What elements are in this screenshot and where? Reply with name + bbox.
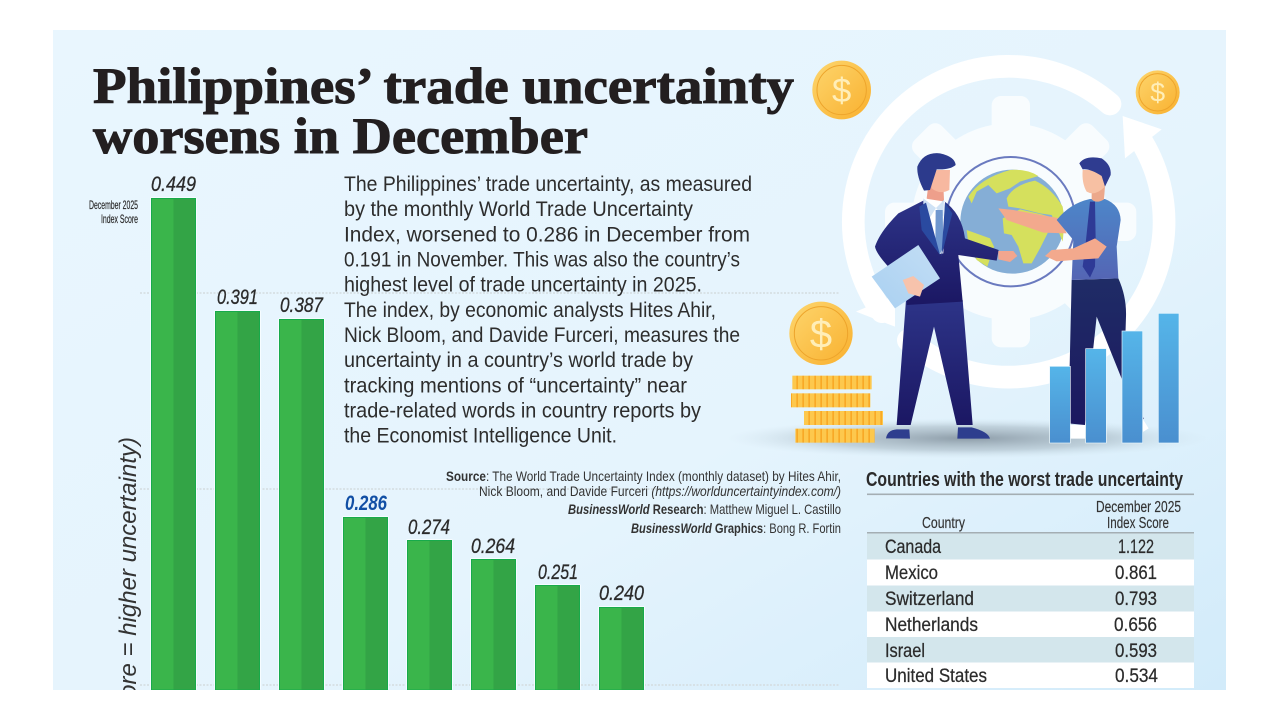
bar 0.251: [534, 561, 581, 690]
source and credits: Source: The World Trade Uncertainty Index (monthly dataset) by Hites Ahir,: [446, 468, 841, 484]
table header: [867, 494, 1194, 534]
source and credits: BusinessWorld Research: Matthew Miguel L. Castillo: [568, 501, 841, 517]
bar 0.387: 0.387: [280, 294, 324, 317]
row: Mexico: 0.861: [1115, 562, 1157, 584]
axis note: December 2025 Index Score: December 2025: [89, 198, 138, 212]
body text: by the monthly World Trade Uncertainty: [344, 197, 693, 221]
title: worsens in December: [93, 109, 588, 165]
icon: coin top right: $: [1150, 78, 1165, 108]
row: Israel: Israel: [885, 640, 925, 662]
title: Philippines’ trade uncertainty: [93, 59, 794, 115]
icon: gear: [885, 96, 1136, 347]
icon: coin left: [789, 302, 853, 365]
bar 0.286 highlighted: 0.286: [345, 492, 387, 515]
row: Mexico: [867, 560, 1194, 586]
arrowhead: lower left: [856, 295, 895, 327]
axis label: ore = higher uncertainty): [115, 437, 142, 698]
bar 0.286 highlighted: [342, 492, 389, 690]
table: countries with the worst trade uncertainty: [866, 469, 1194, 688]
chart: grid lines and bars: [89, 173, 840, 698]
body text: The index, by economic analysts Hites Ahir,: [344, 298, 716, 322]
icon: coin left: $: [810, 313, 832, 357]
title: [93, 59, 794, 165]
body text: [344, 172, 752, 448]
row: Mexico: Mexico: [885, 562, 938, 584]
bar 0.240: [598, 582, 645, 690]
blue rising bars: [1050, 313, 1179, 443]
man on the left: [872, 153, 1017, 439]
body text: Nick Bloom, and Davide Furceri, measures the: [344, 323, 740, 347]
row: Israel: 0.593: [1115, 640, 1157, 662]
row: Canada: Canada: [885, 536, 941, 558]
bar 0.264: [470, 535, 517, 690]
row: United States: United States: [885, 665, 987, 687]
bar 0.449: [150, 173, 197, 690]
table title: Countries with the worst trade uncertainty: [866, 469, 1184, 491]
bar 0.274: [406, 516, 453, 690]
row: Switzerland: Switzerland: [885, 588, 974, 610]
table header: Index Score: [1107, 515, 1169, 532]
icon: globe: [946, 157, 1075, 286]
bar 0.387: [278, 294, 325, 690]
icon: coin top left: $: [832, 72, 851, 110]
icon: circular arrows: [853, 66, 1164, 377]
row: United States: [867, 662, 1194, 688]
body text: tracking mentions of “uncertainty” near: [344, 374, 687, 398]
body text: Index, worsened to 0.286 in December from: [344, 222, 750, 246]
table header: December 2025: [1096, 499, 1181, 516]
bar 0.264: 0.264: [471, 535, 515, 558]
body text: The Philippines’ trade uncertainty, as measured: [344, 172, 752, 196]
arrowhead: top right: [1123, 116, 1162, 158]
axis note: December 2025 Index Score: Index Score: [101, 212, 138, 226]
row: Netherlands: [867, 612, 1194, 637]
axis note: December 2025 Index Score: [90, 200, 138, 224]
body text: trade-related words in country reports by: [344, 398, 701, 422]
row: Canada: [867, 534, 1194, 560]
source and credits: Nick Bloom, and Davide Furceri (https://worlduncertaintyindex.com/): [479, 483, 841, 499]
floor shadow: [727, 418, 1207, 458]
bar 0.391: 0.391: [217, 286, 258, 309]
bar 0.240: 0.240: [599, 582, 644, 605]
row: Canada: 1.122: [1118, 536, 1154, 558]
bar 0.391: [214, 286, 261, 690]
coin stacks: [791, 376, 883, 443]
body text: the Economist Intelligence Unit.: [344, 424, 617, 448]
icon: coin top left: [812, 61, 871, 119]
bar 0.449: 0.449: [151, 173, 196, 196]
row: Switzerland: 0.793: [1115, 588, 1157, 610]
source and credits: [446, 468, 841, 536]
illustration: business people, globe, gear and coins: [727, 61, 1207, 458]
icon: coin top right: [1136, 70, 1180, 114]
row: United States: 0.534: [1115, 665, 1158, 687]
row: Israel: [867, 637, 1194, 662]
bar 0.251: 0.251: [538, 561, 578, 584]
body text: uncertainty in a country’s world trade by: [344, 348, 693, 372]
row: Netherlands: 0.656: [1114, 614, 1157, 636]
body text: highest level of trade uncertainty in 2025.: [344, 272, 702, 296]
bar 0.274: 0.274: [408, 516, 450, 539]
body text: 0.191 in November. This was also the country’s: [344, 248, 740, 272]
row: Switzerland: [867, 586, 1194, 612]
row: Netherlands: Netherlands: [885, 614, 978, 636]
man on the right: [998, 157, 1149, 439]
source and credits: BusinessWorld Graphics: Bong R. Fortin: [631, 520, 841, 536]
table header: Country: [922, 515, 965, 532]
